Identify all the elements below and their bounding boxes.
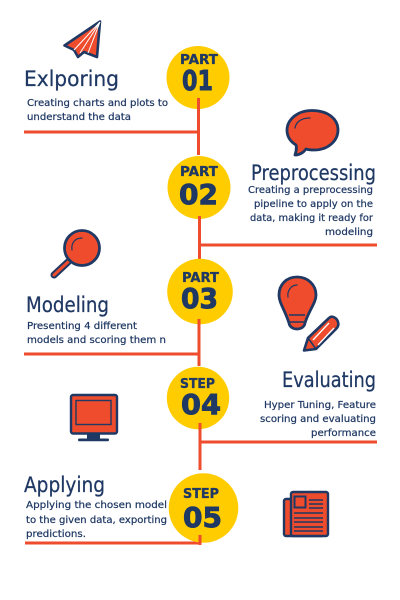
step 1: part 01 badge: PART [180,52,219,68]
step 2: description: data, making it ready for [250,213,374,224]
step 5: description [26,500,167,540]
step 3: heading: Modeling [26,293,109,317]
step 5: description: Applying the chosen model [26,500,167,511]
step 4: light bulb icon [279,277,316,329]
step 5: step 05 badge: 05 [183,501,222,534]
step 1: part 01 badge [166,46,230,110]
step 4: description: performance [311,428,376,439]
step 2: description: Creating a preprocessing [248,185,373,196]
step 3: part 03 badge [167,259,233,325]
step 2: speech bubble icon [287,110,338,155]
step 3: magnifying glass icon [54,230,100,275]
step 5: newspaper icon [284,492,328,536]
step 3: description [27,321,166,346]
step 4: description: Hyper Tuning, Feature [264,400,376,411]
step 4: description: scoring and evaluating [260,414,376,425]
step 4: description [260,400,376,439]
step 1: description: understand the data [27,112,131,123]
step 2: description: modeling [325,227,373,238]
timeline connectors [24,98,377,544]
step 3: description: models and scoring them n [27,335,166,346]
step 1: part 01 badge: 01 [182,64,213,97]
step 3: description: Presenting 4 different [27,321,137,332]
step 4: pencil icon [304,317,338,350]
step 1: description [27,98,168,123]
step 2: description: pipeline to apply on the [254,199,373,210]
step 5: step 05 badge: STEP [183,486,219,502]
step 5: description: to the given data, exporting [26,515,167,526]
step 4: step 04 badge [167,367,229,430]
step 2: description [248,185,374,238]
step 2: heading: Preprocessing [251,161,376,185]
step 5: step 05 badge [169,473,238,545]
step 4: step 04 badge: 04 [181,388,221,421]
step 5: heading: Applying [24,473,105,497]
step 1: description: Creating charts and plots to [27,98,168,109]
step 1: heading: Exlporing [24,67,119,91]
step 3: part 03 badge: PART [182,270,220,286]
step 2: part 02 badge [168,156,230,220]
step 2: part 02 badge: 02 [179,178,218,211]
step 2: part 02 badge: PART [180,164,219,180]
step 4: heading: Evaluating [282,368,376,392]
step 4: step 04 badge: STEP [180,376,215,392]
step 3: part 03 badge: 03 [181,282,218,315]
step 1: paper plane icon [64,22,100,57]
step 5: monitor icon [71,395,117,441]
step 5: description: predictions. [26,529,86,540]
